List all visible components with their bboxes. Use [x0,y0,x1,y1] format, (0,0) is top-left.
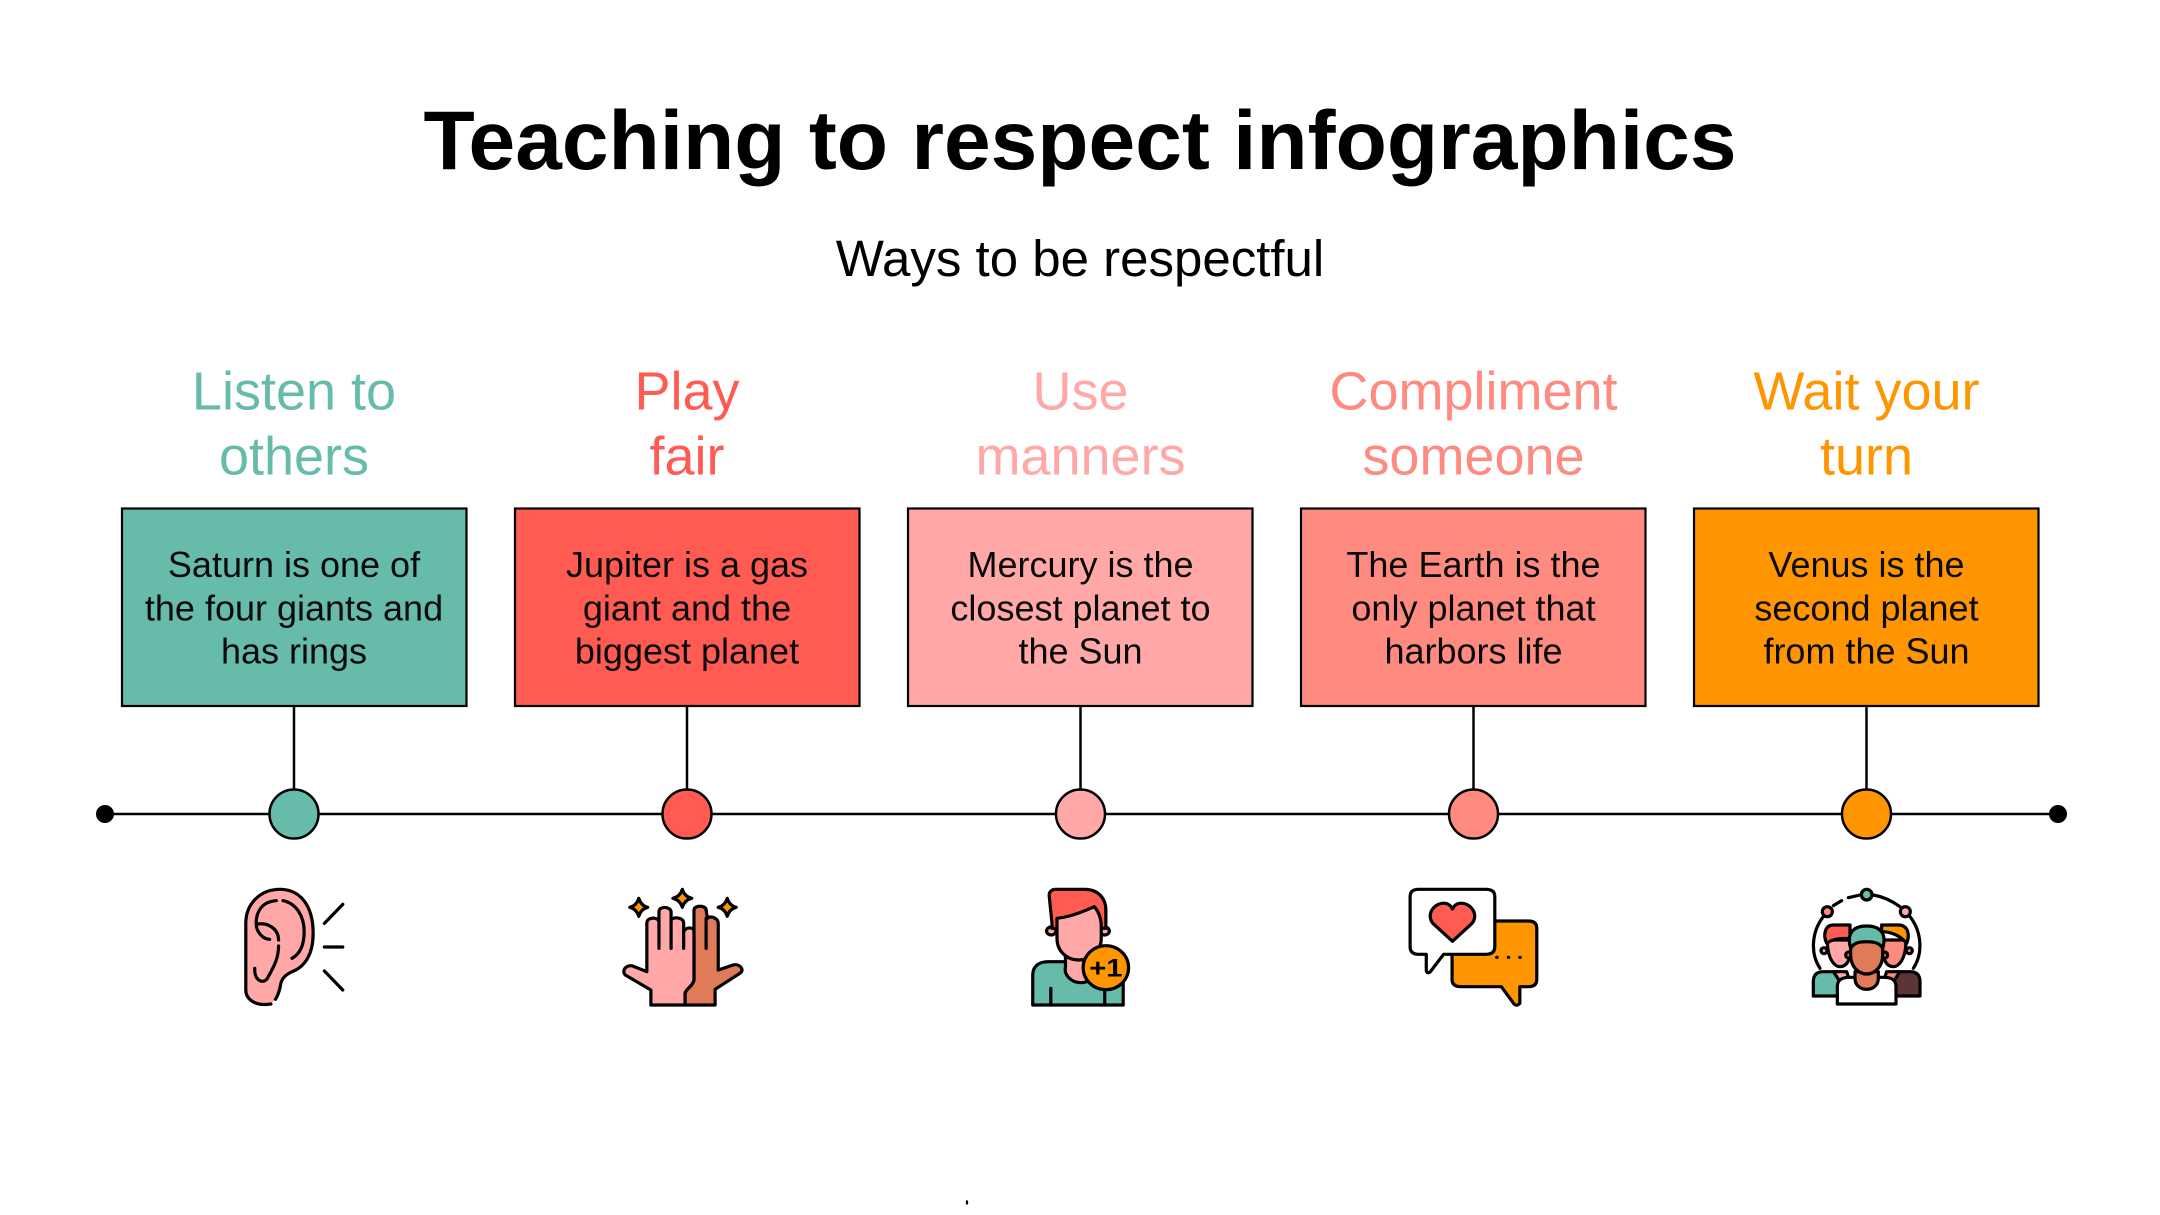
panel: listen to others [122,362,466,1005]
connector [686,706,688,790]
heading: Use [1032,362,1129,422]
text box [1301,508,1646,706]
timeline axis [96,805,2067,823]
panel: use manners [908,362,1252,1005]
heading: Play [634,362,740,422]
icon: person with plus one [1033,889,1129,1005]
heading: fair [649,426,725,486]
description: Mercury is the [967,544,1194,585]
text box [1694,508,2038,706]
connector [1079,706,1082,790]
description: only planet that [1351,587,1596,628]
heading: Compliment [1329,362,1618,422]
text box [122,508,466,706]
heading: manners [975,426,1186,486]
description: Venus is the [1768,544,1965,585]
description: from the Sun [1763,631,1970,672]
icon: ear [246,889,343,1005]
connector [1472,706,1475,790]
icon: group of people [1813,889,1920,1004]
description: the four giants and [145,587,443,628]
title: Teaching to respect infographics [424,93,1736,187]
description: harbors life [1384,631,1563,672]
description: Saturn is one of [168,544,421,585]
heading: someone [1362,426,1585,486]
description: giant and the [583,587,791,628]
heading: others [219,426,369,486]
timeline marker [1056,790,1105,838]
text box [908,508,1252,706]
description: second planet [1754,587,1979,628]
panel: wait your turn [1694,362,2038,1004]
stray mark [966,1200,968,1205]
timeline marker [270,790,318,838]
heading: turn [1820,426,1913,486]
description: closest planet to [950,587,1211,628]
heading: Listen to [192,362,396,422]
timeline marker [662,790,712,838]
icon: chat bubbles [1410,889,1537,1005]
description: The Earth is the [1346,544,1601,585]
panel: compliment someone [1301,362,1646,1005]
description: Jupiter is a gas [566,544,808,585]
icon: person with plus one: +1 [1089,954,1123,982]
text box [515,508,860,706]
icon: high five [624,889,742,1005]
connector [1865,706,1868,790]
description: has rings [221,631,367,672]
description: the Sun [1018,631,1143,672]
timeline marker [1842,790,1891,838]
connector [293,706,295,790]
timeline marker [1449,790,1498,838]
subtitle: Ways to be respectful [836,230,1324,287]
panel: play fair [515,362,860,1005]
heading: Wait your [1753,362,1980,422]
description: biggest planet [575,631,799,672]
